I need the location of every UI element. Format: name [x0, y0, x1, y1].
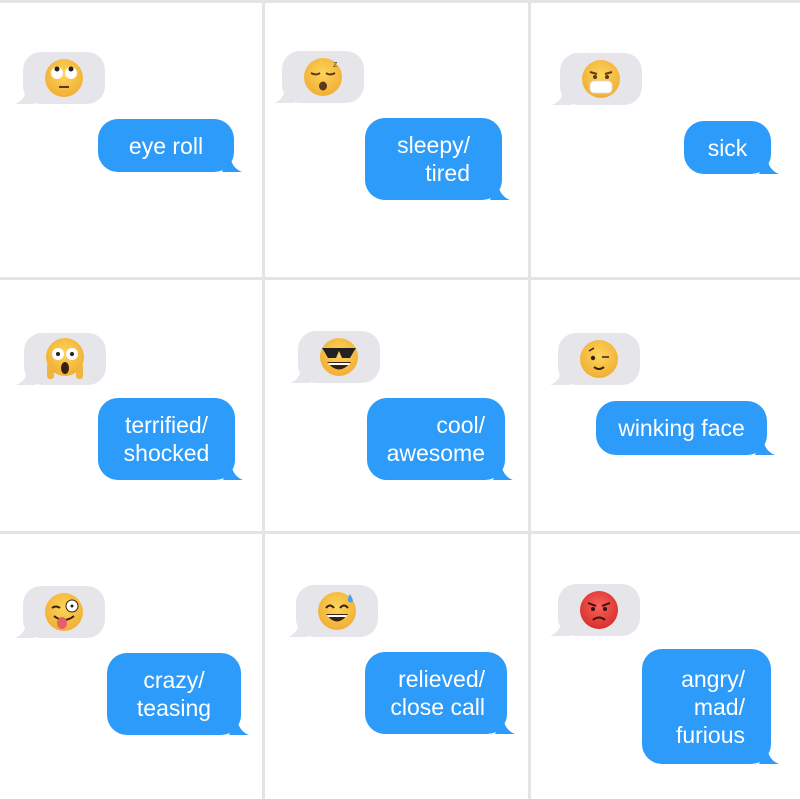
- blue bubble: crazy/teasing: teasing: [137, 695, 211, 721]
- gray bubble: mask emoji: [552, 53, 642, 105]
- blue bubble: angry/mad/furious: angry/: [681, 666, 745, 692]
- blue bubble: eye roll: eye roll: [129, 132, 203, 158]
- gray bubble: sleepy emoji: z: [333, 59, 338, 69]
- blue bubble: terrified/shocked: shocked: [124, 440, 209, 466]
- gray bubble: eye roll emoji: [16, 52, 105, 104]
- cell 5: cool: [290, 331, 513, 480]
- gray bubble: zany emoji: [16, 586, 105, 638]
- blue bubble: sleepy/tired: [365, 118, 510, 200]
- cell 1: eye roll: [16, 52, 242, 172]
- cell 4: terrified: [16, 333, 243, 480]
- blue bubble: winking face: [596, 401, 775, 455]
- blue bubble: sick: [684, 121, 779, 174]
- gray bubble: sweat smile emoji: [288, 585, 378, 637]
- blue bubble: angry/mad/furious: mad/: [694, 694, 745, 720]
- cell 2: sleepy: [274, 51, 510, 200]
- blue bubble: relieved/close call: close call: [390, 694, 485, 720]
- blue bubble: cool/awesome: cool/: [436, 412, 485, 438]
- cell 6: winking: [550, 333, 775, 455]
- gray bubble: sleepy emoji: [274, 51, 364, 103]
- cell 7: crazy: [16, 586, 249, 735]
- cell 9: angry: [550, 584, 779, 764]
- blue bubble: winking face: winking face: [618, 415, 745, 441]
- blue bubble: angry/mad/furious: furious: [676, 722, 745, 748]
- cell 3: sick: [552, 53, 779, 174]
- gray bubble: sunglasses emoji: [290, 331, 380, 383]
- cell 8: relieved: [288, 585, 515, 734]
- blue bubble: crazy/teasing: [107, 653, 249, 735]
- blue bubble: cool/awesome: [367, 398, 513, 480]
- gray bubble: wink emoji: [550, 333, 640, 385]
- blue bubble: cool/awesome: awesome: [387, 440, 485, 466]
- gray bubble: scream emoji: [16, 333, 106, 385]
- blue bubble: relieved/close call: [365, 652, 515, 734]
- blue bubble: eye roll: [98, 119, 242, 172]
- gray bubble: angry emoji: [550, 584, 640, 636]
- blue bubble: angry/mad/furious: [642, 649, 779, 764]
- blue bubble: terrified/shocked: [98, 398, 243, 480]
- blue bubble: sick: sick: [708, 134, 747, 160]
- blue bubble: sleepy/tired: tired: [425, 160, 470, 186]
- blue bubble: terrified/shocked: terrified/: [125, 412, 208, 438]
- blue bubble: crazy/teasing: crazy/: [143, 667, 205, 693]
- blue bubble: relieved/close call: relieved/: [398, 666, 485, 692]
- blue bubble: sleepy/tired: sleepy/: [397, 132, 470, 158]
